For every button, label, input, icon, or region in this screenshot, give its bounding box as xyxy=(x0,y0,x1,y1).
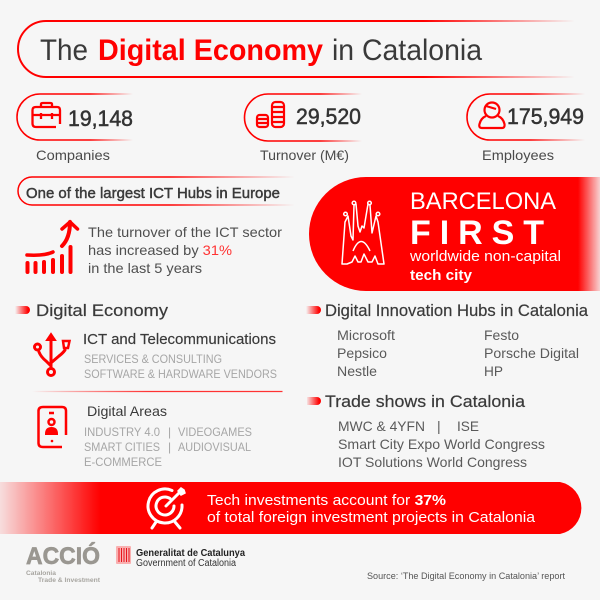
stat: employees: Employees xyxy=(482,147,554,163)
icon: coin stacks xyxy=(257,102,284,127)
stat: turnover: Turnover (M€) xyxy=(260,147,349,163)
banner: tech investments: of total foreign investment projects in Catalonia xyxy=(207,509,536,526)
text: Digital Areas xyxy=(84,403,252,469)
text: ICT and Telecommunications xyxy=(83,332,277,381)
list: trade shows: IOT Solutions World Congress xyxy=(338,454,527,470)
stat: companies: 19,148 xyxy=(68,106,133,131)
icon: person xyxy=(479,102,505,128)
list: innovation hubs: HP xyxy=(484,363,503,379)
list: trade shows: MWC & 4YFN xyxy=(338,418,425,434)
text: Digital Areas: | xyxy=(168,440,171,454)
text: ICT and Telecommunications: SOFTWARE & HARDWARE VENDORS xyxy=(84,367,277,381)
panel: Barcelona first: FIRST xyxy=(410,214,544,252)
text: Digital Areas: VIDEOGAMES xyxy=(178,425,252,439)
text: Digital Areas: | xyxy=(168,425,171,439)
heading: Digital Economy: Digital Economy xyxy=(36,301,169,320)
text: turnover growth: has increased by 31% xyxy=(88,242,232,258)
title xyxy=(18,21,575,77)
logo: Generalitat de Catalunya: Government of Catalonia xyxy=(136,558,236,569)
heading: ICT hubs: One of the largest ICT Hubs in Europe xyxy=(26,186,280,202)
list: innovation hubs: Porsche Digital xyxy=(484,345,579,361)
text: Digital Areas: Digital Areas xyxy=(87,403,167,419)
text: ICT and Telecommunications: SERVICES & CONSULTING xyxy=(84,352,222,366)
text: Digital Areas: SMART CITIES xyxy=(84,440,160,454)
title: The xyxy=(40,34,88,67)
icon: briefcase xyxy=(32,103,60,127)
text: turnover growth: The turnover of the ICT sector xyxy=(88,224,282,240)
icon: target xyxy=(148,488,185,528)
title: Digital Economy xyxy=(98,34,323,67)
list: innovation hubs xyxy=(337,327,579,379)
list: trade shows xyxy=(338,418,545,470)
text: Digital Areas: INDUSTRY 4.0 xyxy=(84,425,160,439)
panel: Barcelona first xyxy=(309,177,600,291)
panel: Barcelona first: BARCELONA xyxy=(410,188,556,215)
stat: turnover: 29,520 xyxy=(296,104,361,129)
text: turnover growth xyxy=(88,224,282,276)
text: turnover growth: in the last 5 years xyxy=(88,260,202,276)
stat: turnover xyxy=(244,94,362,163)
list: innovation hubs: Festo xyxy=(484,327,519,343)
icon: phone with person xyxy=(38,407,66,447)
icon: Sagrada Familia xyxy=(342,201,384,264)
icon: growth chart with arrow xyxy=(27,222,78,272)
stat: companies xyxy=(17,94,133,163)
heading: Digital Innovation Hubs: Digital Innovation Hubs in Catalonia xyxy=(325,301,589,320)
list: trade shows: | xyxy=(437,418,441,434)
banner: tech investments: Tech investments account for 37% xyxy=(207,492,446,509)
logo: ACCIO: Trade & Investment xyxy=(38,578,100,584)
heading: Trade shows: Trade shows in Catalonia xyxy=(325,392,526,411)
list: innovation hubs: Pepsico xyxy=(337,345,387,361)
heading: ICT hubs xyxy=(18,177,295,205)
text: ICT and Telecommunications: ICT and Telecommunications xyxy=(83,332,276,348)
logo: Generalitat de Catalunya xyxy=(116,546,245,569)
source note: Source: ‘The Digital Economy in Catalonia’ report xyxy=(367,571,565,581)
text: Digital Areas: E-COMMERCE xyxy=(84,455,162,469)
icon: USB xyxy=(34,334,70,376)
list: innovation hubs: Microsoft xyxy=(337,327,395,343)
list: innovation hubs: Nestle xyxy=(337,363,377,379)
logo: ACCIO xyxy=(26,542,100,584)
panel: Barcelona first: worldwide non-capital xyxy=(409,249,561,265)
stat: employees xyxy=(467,94,585,163)
logo: ACCIO: Catalonia xyxy=(26,571,57,577)
text: Digital Areas: AUDIOVISUAL xyxy=(178,440,251,454)
stat: companies: Companies xyxy=(36,147,110,163)
stat: employees: 175,949 xyxy=(507,104,584,129)
logo: Generalitat de Catalunya: Generalitat de Catalunya xyxy=(136,548,245,559)
logo: ACCIO: ACCIÓ xyxy=(26,542,100,570)
list: trade shows: ISE xyxy=(457,418,479,434)
panel: Barcelona first: tech city xyxy=(410,268,472,284)
title: in Catalonia xyxy=(332,34,482,67)
list: trade shows: Smart City Expo World Congress xyxy=(338,436,545,452)
banner: tech investments xyxy=(0,482,581,534)
